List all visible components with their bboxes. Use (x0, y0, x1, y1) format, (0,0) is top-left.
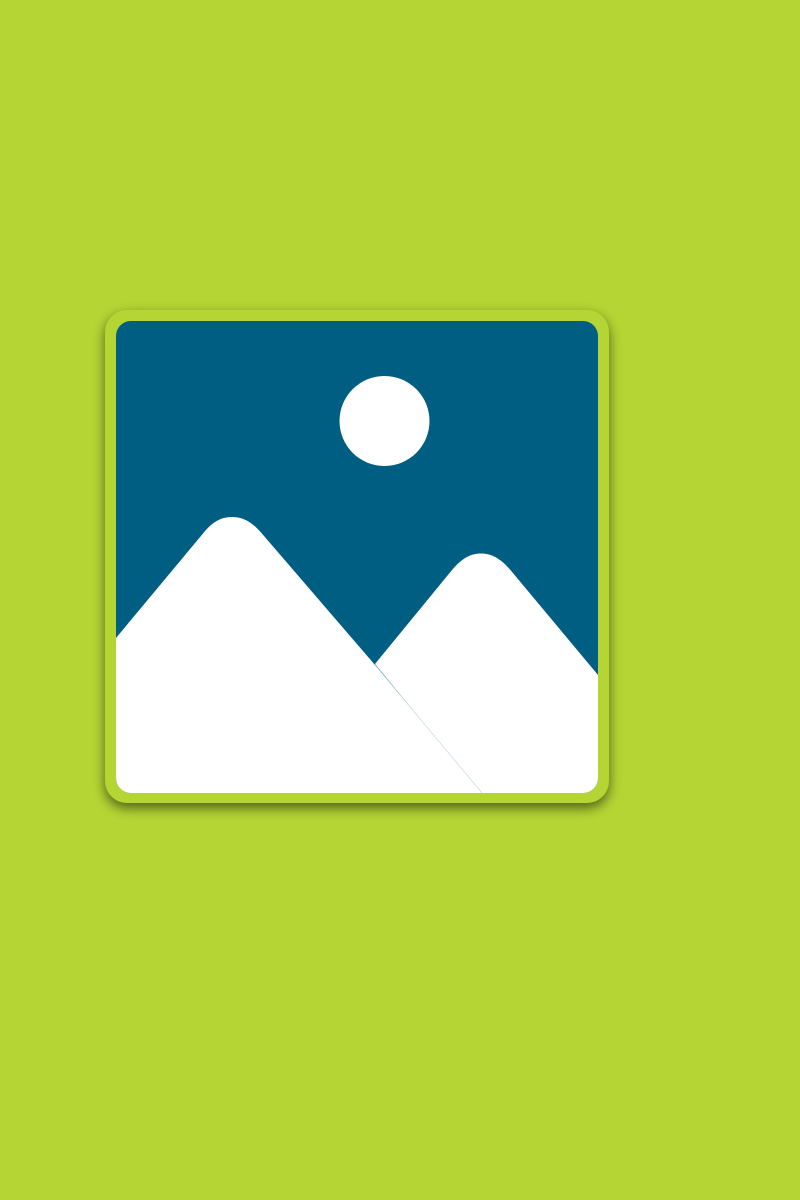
icon: sun (340, 376, 430, 466)
icon: image placeholder (105, 310, 609, 808)
icon: mountains (116, 517, 598, 793)
